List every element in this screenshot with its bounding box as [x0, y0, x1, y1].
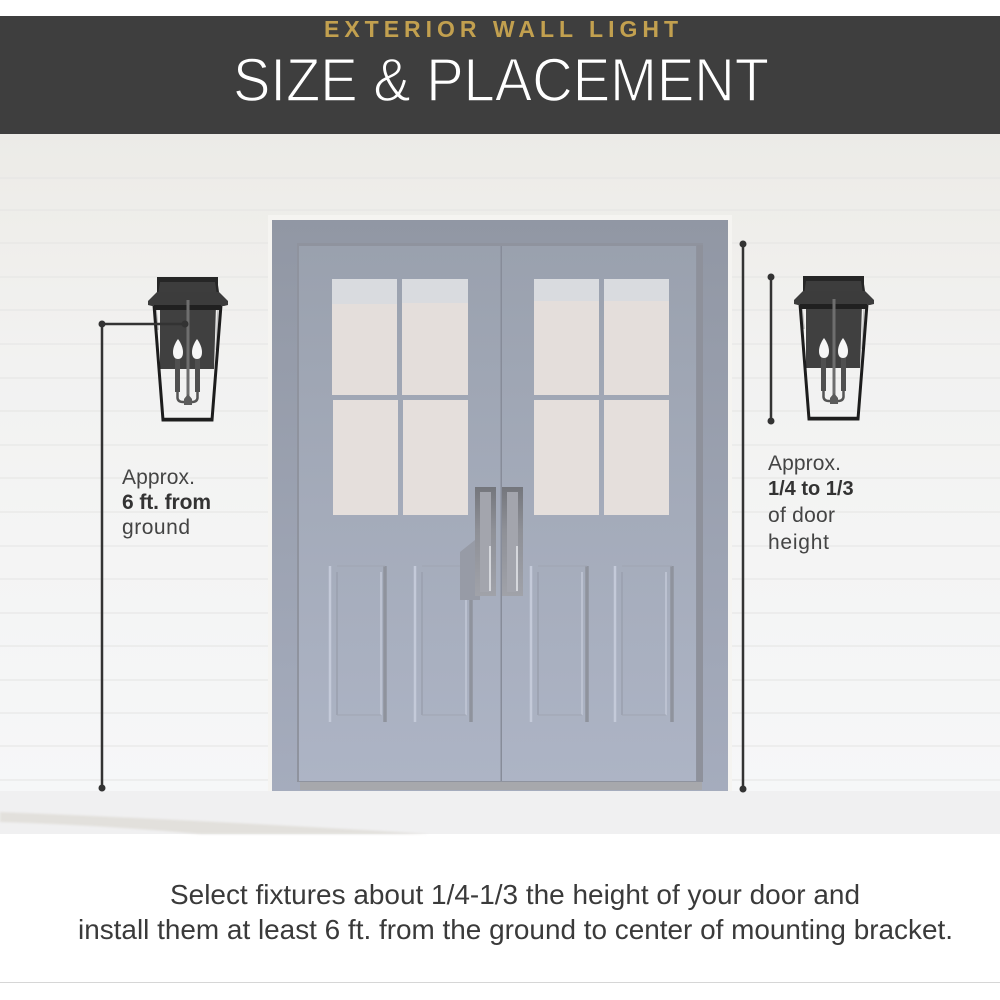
window panes [332, 279, 669, 515]
label: 6 ft from ground: Approx. [122, 466, 195, 489]
door height dimension line [740, 240, 746, 792]
bottom border [0, 982, 1000, 983]
main title: SIZE & PLACEMENT [233, 46, 769, 114]
floor [0, 791, 1000, 834]
door handles [460, 487, 523, 600]
label: 6 ft from ground: 6 ft. from [122, 491, 211, 514]
lower raised panels [330, 566, 672, 722]
caption: Select fixtures about 1/4-1/3 the height of your door and [170, 879, 860, 910]
door leaves [297, 243, 703, 782]
label: 1/4 to 1/3 of door height: of door [768, 504, 835, 527]
lamp height dimension line [768, 274, 774, 424]
label: 1/4 to 1/3 of door height: Approx. [768, 452, 841, 475]
label: 6 ft from ground: ground [122, 516, 190, 539]
wall siding [0, 134, 1000, 794]
label: 1/4 to 1/3 of door height: 1/4 to 1/3 [768, 478, 854, 500]
double door [268, 215, 732, 791]
eyebrow heading: EXTERIOR WALL LIGHT [324, 16, 678, 42]
door frame [268, 215, 732, 791]
wall light left [148, 277, 228, 420]
wall light right [794, 276, 874, 419]
height dimension line: 6 ft from ground [98, 320, 188, 792]
caption: install them at least 6 ft. from the ground to center of mounting bracket. [78, 914, 953, 945]
label: 1/4 to 1/3 of door height: height [768, 531, 829, 554]
header band [0, 16, 1000, 134]
